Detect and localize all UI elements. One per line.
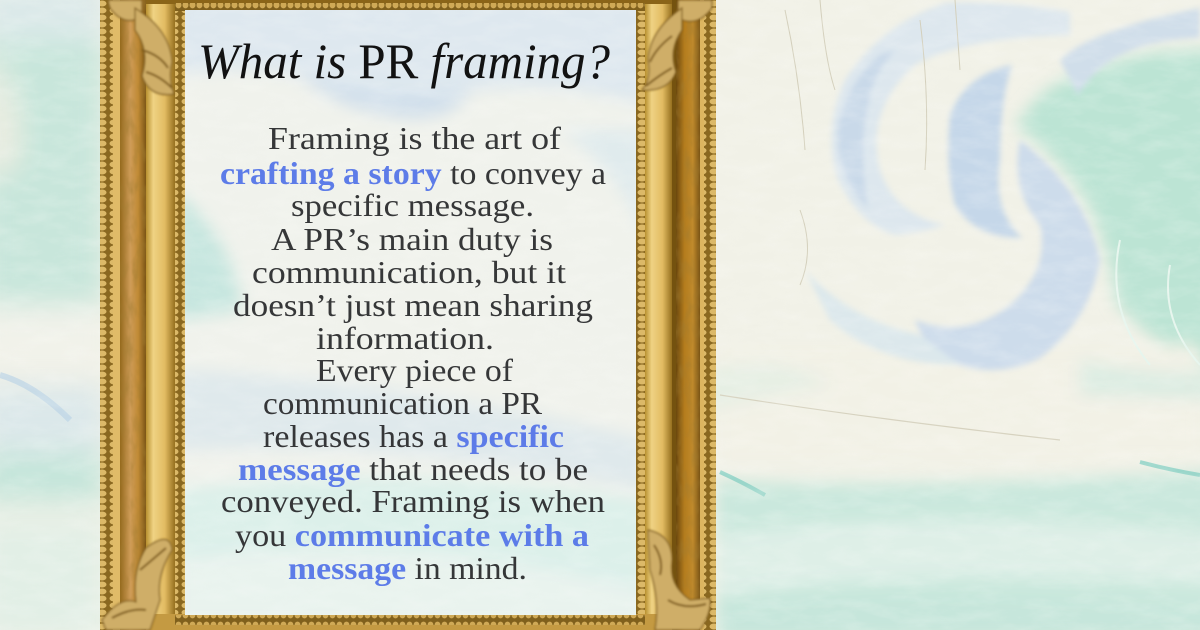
gold picture frame xyxy=(100,0,716,630)
body text: message in mind. xyxy=(288,550,527,586)
background: cracks, highlights and teal streaks xyxy=(0,0,1200,495)
body text: conveyed. Framing is when xyxy=(221,483,605,519)
body text: specific message. xyxy=(291,187,534,223)
body text xyxy=(220,120,606,586)
frame: corner ornaments xyxy=(102,0,712,630)
body text: information. xyxy=(316,320,494,356)
body text: communication a PR xyxy=(263,385,543,421)
frame: base rails xyxy=(100,0,716,630)
title: What is PR framing? xyxy=(198,33,610,89)
body text: Every piece of xyxy=(316,352,513,388)
body text: you communicate with a xyxy=(235,517,589,553)
body text: crafting a story to convey a xyxy=(220,155,606,191)
body text: releases has a specific xyxy=(263,418,564,454)
background: left teal strokes xyxy=(0,0,105,630)
body text: communication, but it xyxy=(252,254,566,290)
background: blue swirl strokes xyxy=(805,2,1200,370)
body text: A PR’s main duty is xyxy=(271,221,553,257)
body text: message that needs to be xyxy=(238,451,588,487)
canvas: paint washes xyxy=(185,10,636,596)
framed canvas panel xyxy=(175,0,646,625)
background: mint swirl xyxy=(700,50,1200,630)
body text: Framing is the art of xyxy=(268,120,561,156)
body text: doesn’t just mean sharing xyxy=(233,287,593,323)
